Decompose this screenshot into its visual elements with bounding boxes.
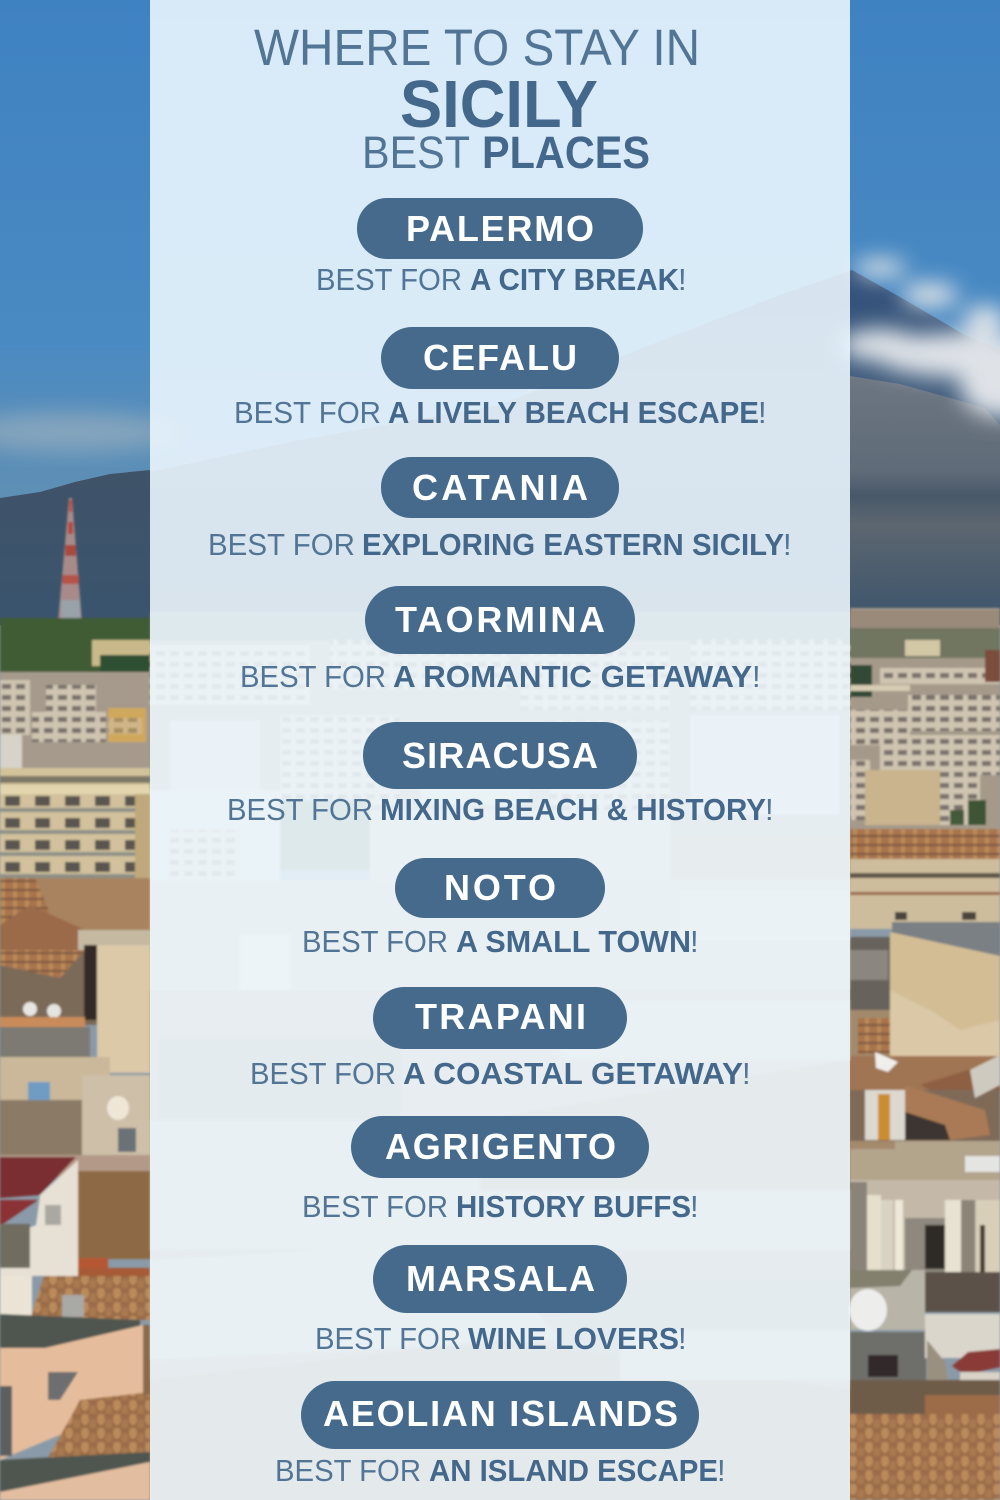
caption: Catania: EXPLORING EASTERN SICILY xyxy=(362,527,784,562)
pill: Taormina xyxy=(365,586,635,654)
wispy cloud on the left xyxy=(0,412,180,452)
pill: Cefalu xyxy=(381,327,619,389)
entry: Agrigento xyxy=(302,1116,699,1224)
entry: Catania xyxy=(208,457,792,562)
pill: Trapani xyxy=(373,987,627,1049)
far left city xyxy=(0,672,150,772)
title line: best places: PLACES xyxy=(482,127,650,178)
caption: Trapani: ! xyxy=(742,1056,751,1091)
caption: Aeolian Islands: BEST FOR xyxy=(275,1453,421,1488)
pill: Cefalu: CEFALU xyxy=(423,337,577,378)
caption: Palermo: BEST FOR xyxy=(316,262,462,297)
left rooftops xyxy=(0,878,150,950)
left grey roof and peach house xyxy=(0,1314,140,1348)
caption: Catania: ! xyxy=(783,527,792,562)
pill: Noto: NOTO xyxy=(444,867,556,908)
caption: Cefalu: BEST FOR xyxy=(234,395,381,430)
pill: Agrigento: AGRIGENTO xyxy=(385,1126,616,1167)
caption: Marsala: ! xyxy=(678,1321,687,1356)
caption: Agrigento: HISTORY BUFFS xyxy=(456,1189,691,1224)
caption: Taormina: A ROMANTIC GETAWAY xyxy=(393,659,752,694)
right grey band xyxy=(850,1141,1000,1181)
caption: Cefalu xyxy=(234,395,767,430)
caption: Palermo: ! xyxy=(678,262,687,297)
title line: best places xyxy=(362,127,650,178)
entry: Cefalu xyxy=(234,327,767,430)
caption: Trapani: BEST FOR xyxy=(250,1056,396,1091)
pill: Trapani: TRAPANI xyxy=(415,996,586,1037)
caption: Aeolian Islands xyxy=(275,1453,726,1488)
caption: Siracusa: MIXING BEACH & HISTORY xyxy=(380,792,766,827)
title line: where to stay in: WHERE TO STAY IN xyxy=(254,19,700,76)
pill: Marsala xyxy=(373,1245,627,1313)
title line: best places: BEST xyxy=(362,127,470,178)
centre city under the panel xyxy=(150,640,850,840)
caption: Trapani: A COASTAL GETAWAY xyxy=(403,1056,743,1091)
right bottom tiled roof xyxy=(850,1380,1000,1416)
pill: Marsala: MARSALA xyxy=(406,1258,595,1299)
caption: Noto xyxy=(302,924,699,959)
title xyxy=(254,19,700,178)
left tiled roof xyxy=(30,1276,150,1320)
caption: Noto: A SMALL TOWN xyxy=(456,924,691,959)
caption: Trapani xyxy=(250,1056,751,1091)
entry: Taormina xyxy=(240,586,761,694)
left apartment block xyxy=(0,793,150,883)
caption: Siracusa: BEST FOR xyxy=(227,792,373,827)
red roofs and white wall xyxy=(0,1155,150,1177)
caption: Marsala xyxy=(315,1321,687,1356)
right terracotta roofs xyxy=(850,1056,1000,1096)
pill: Palermo: PALERMO xyxy=(406,208,594,249)
tree line and hillside xyxy=(0,618,150,674)
translucent panel xyxy=(150,0,850,1500)
right town xyxy=(850,608,1000,830)
pill: Taormina: TAORMINA xyxy=(395,599,605,640)
caption: Cefalu: A LIVELY BEACH ESCAPE xyxy=(388,395,759,430)
tan apartment block xyxy=(865,770,940,825)
caption: Taormina: ! xyxy=(752,659,761,694)
title line: Sicily: SICILY xyxy=(400,67,598,142)
pill: Catania xyxy=(381,457,619,518)
caption: Agrigento: BEST FOR xyxy=(302,1189,448,1224)
entry: Palermo xyxy=(316,198,687,297)
entry: Siracusa xyxy=(227,722,774,827)
caption: Aeolian Islands: AN ISLAND ESCAPE xyxy=(429,1453,718,1488)
pill: Siracusa: SIRACUSA xyxy=(402,735,598,776)
caption: Marsala: BEST FOR xyxy=(315,1321,461,1356)
right columned building xyxy=(850,1180,1000,1272)
caption: Palermo xyxy=(316,262,687,297)
caption: Noto: BEST FOR xyxy=(302,924,448,959)
entry: Marsala xyxy=(315,1245,687,1356)
Etna clouds xyxy=(840,259,1000,417)
caption: Noto: ! xyxy=(690,924,699,959)
right upper tile roof xyxy=(850,829,1000,859)
entry: Noto xyxy=(302,858,699,959)
caption: Taormina xyxy=(240,659,761,694)
Etna lower ridge xyxy=(850,376,1000,615)
pill: Palermo xyxy=(357,198,643,259)
caption: Aeolian Islands: ! xyxy=(717,1453,726,1488)
entry: Aeolian Islands xyxy=(275,1381,726,1488)
left stone church xyxy=(0,950,100,1025)
caption: Marsala: WINE LOVERS xyxy=(468,1321,679,1356)
left mountain xyxy=(0,470,150,625)
right cream wall xyxy=(892,922,1000,956)
caption: Palermo: A CITY BREAK xyxy=(470,262,680,297)
pill: Agrigento xyxy=(351,1116,649,1178)
caption: Cefalu: ! xyxy=(758,395,767,430)
pill: Catania: CATANIA xyxy=(412,467,588,508)
caption: Agrigento xyxy=(302,1189,699,1224)
right satellite dish and balcony xyxy=(850,1270,925,1330)
Mount Etna xyxy=(150,270,1000,625)
pill: Noto xyxy=(395,858,605,918)
pill: Siracusa xyxy=(363,722,637,789)
caption: Taormina: BEST FOR xyxy=(240,659,386,694)
antenna tower xyxy=(58,498,82,622)
pill: Aeolian Islands xyxy=(301,1381,699,1449)
caption: Siracusa: ! xyxy=(765,792,774,827)
entry: Trapani xyxy=(250,987,751,1091)
caption: Catania: BEST FOR xyxy=(208,527,355,562)
pill: Aeolian Islands: AEOLIAN ISLANDS xyxy=(323,1393,678,1434)
caption: Agrigento: ! xyxy=(690,1189,699,1224)
